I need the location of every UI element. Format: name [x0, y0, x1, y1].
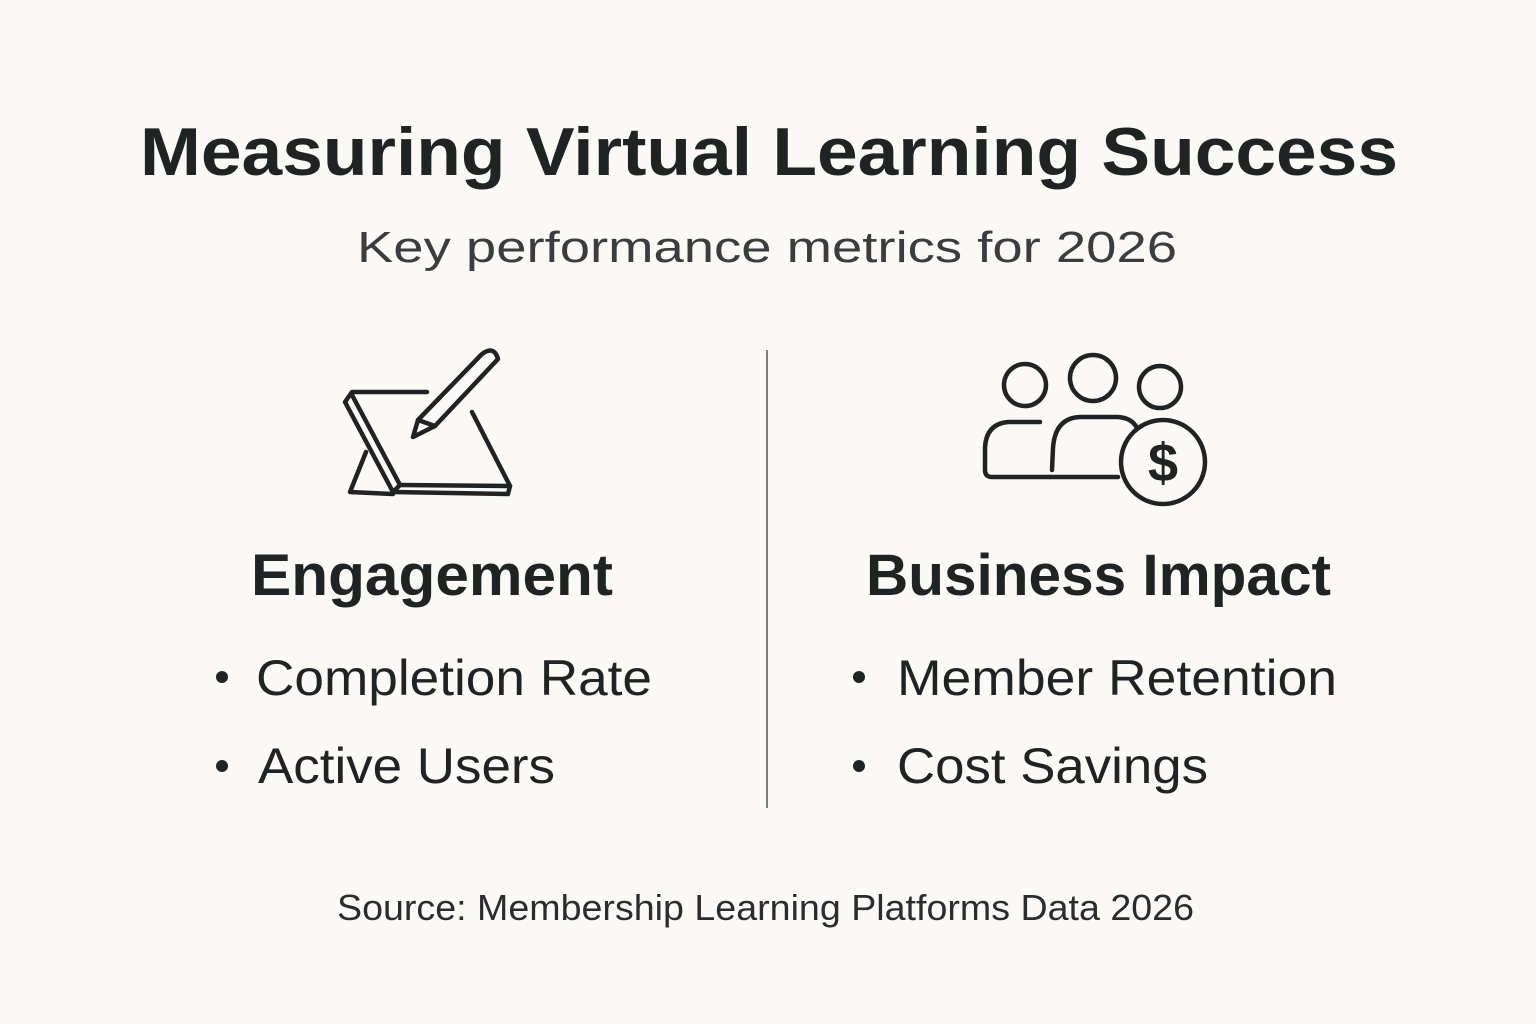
heading: business impact: Business Impact: [866, 543, 1331, 608]
heading: engagement: Engagement: [251, 543, 613, 608]
title: Measuring Virtual Learning Success: [140, 114, 1398, 190]
icon: tablet with pencil: [345, 350, 510, 494]
bullet list: engagement: [216, 650, 652, 794]
bullet list: business impact: Cost Savings: [897, 738, 1208, 794]
bullet list: engagement: Active Users: [258, 738, 555, 794]
panel: engagement: [216, 350, 652, 794]
icon: people with dollar: [985, 355, 1205, 504]
subtitle: Key performance metrics for 2026: [357, 223, 1177, 272]
source note: Source: Membership Learning Platforms Data 2026: [337, 887, 1194, 928]
icon: people with dollar: $: [1148, 433, 1178, 493]
bullet list: engagement: Completion Rate: [256, 650, 652, 706]
bullet list: business impact: Member Retention: [897, 650, 1337, 706]
panel: business impact: [853, 355, 1337, 794]
bullet list: business impact: [853, 650, 1337, 794]
